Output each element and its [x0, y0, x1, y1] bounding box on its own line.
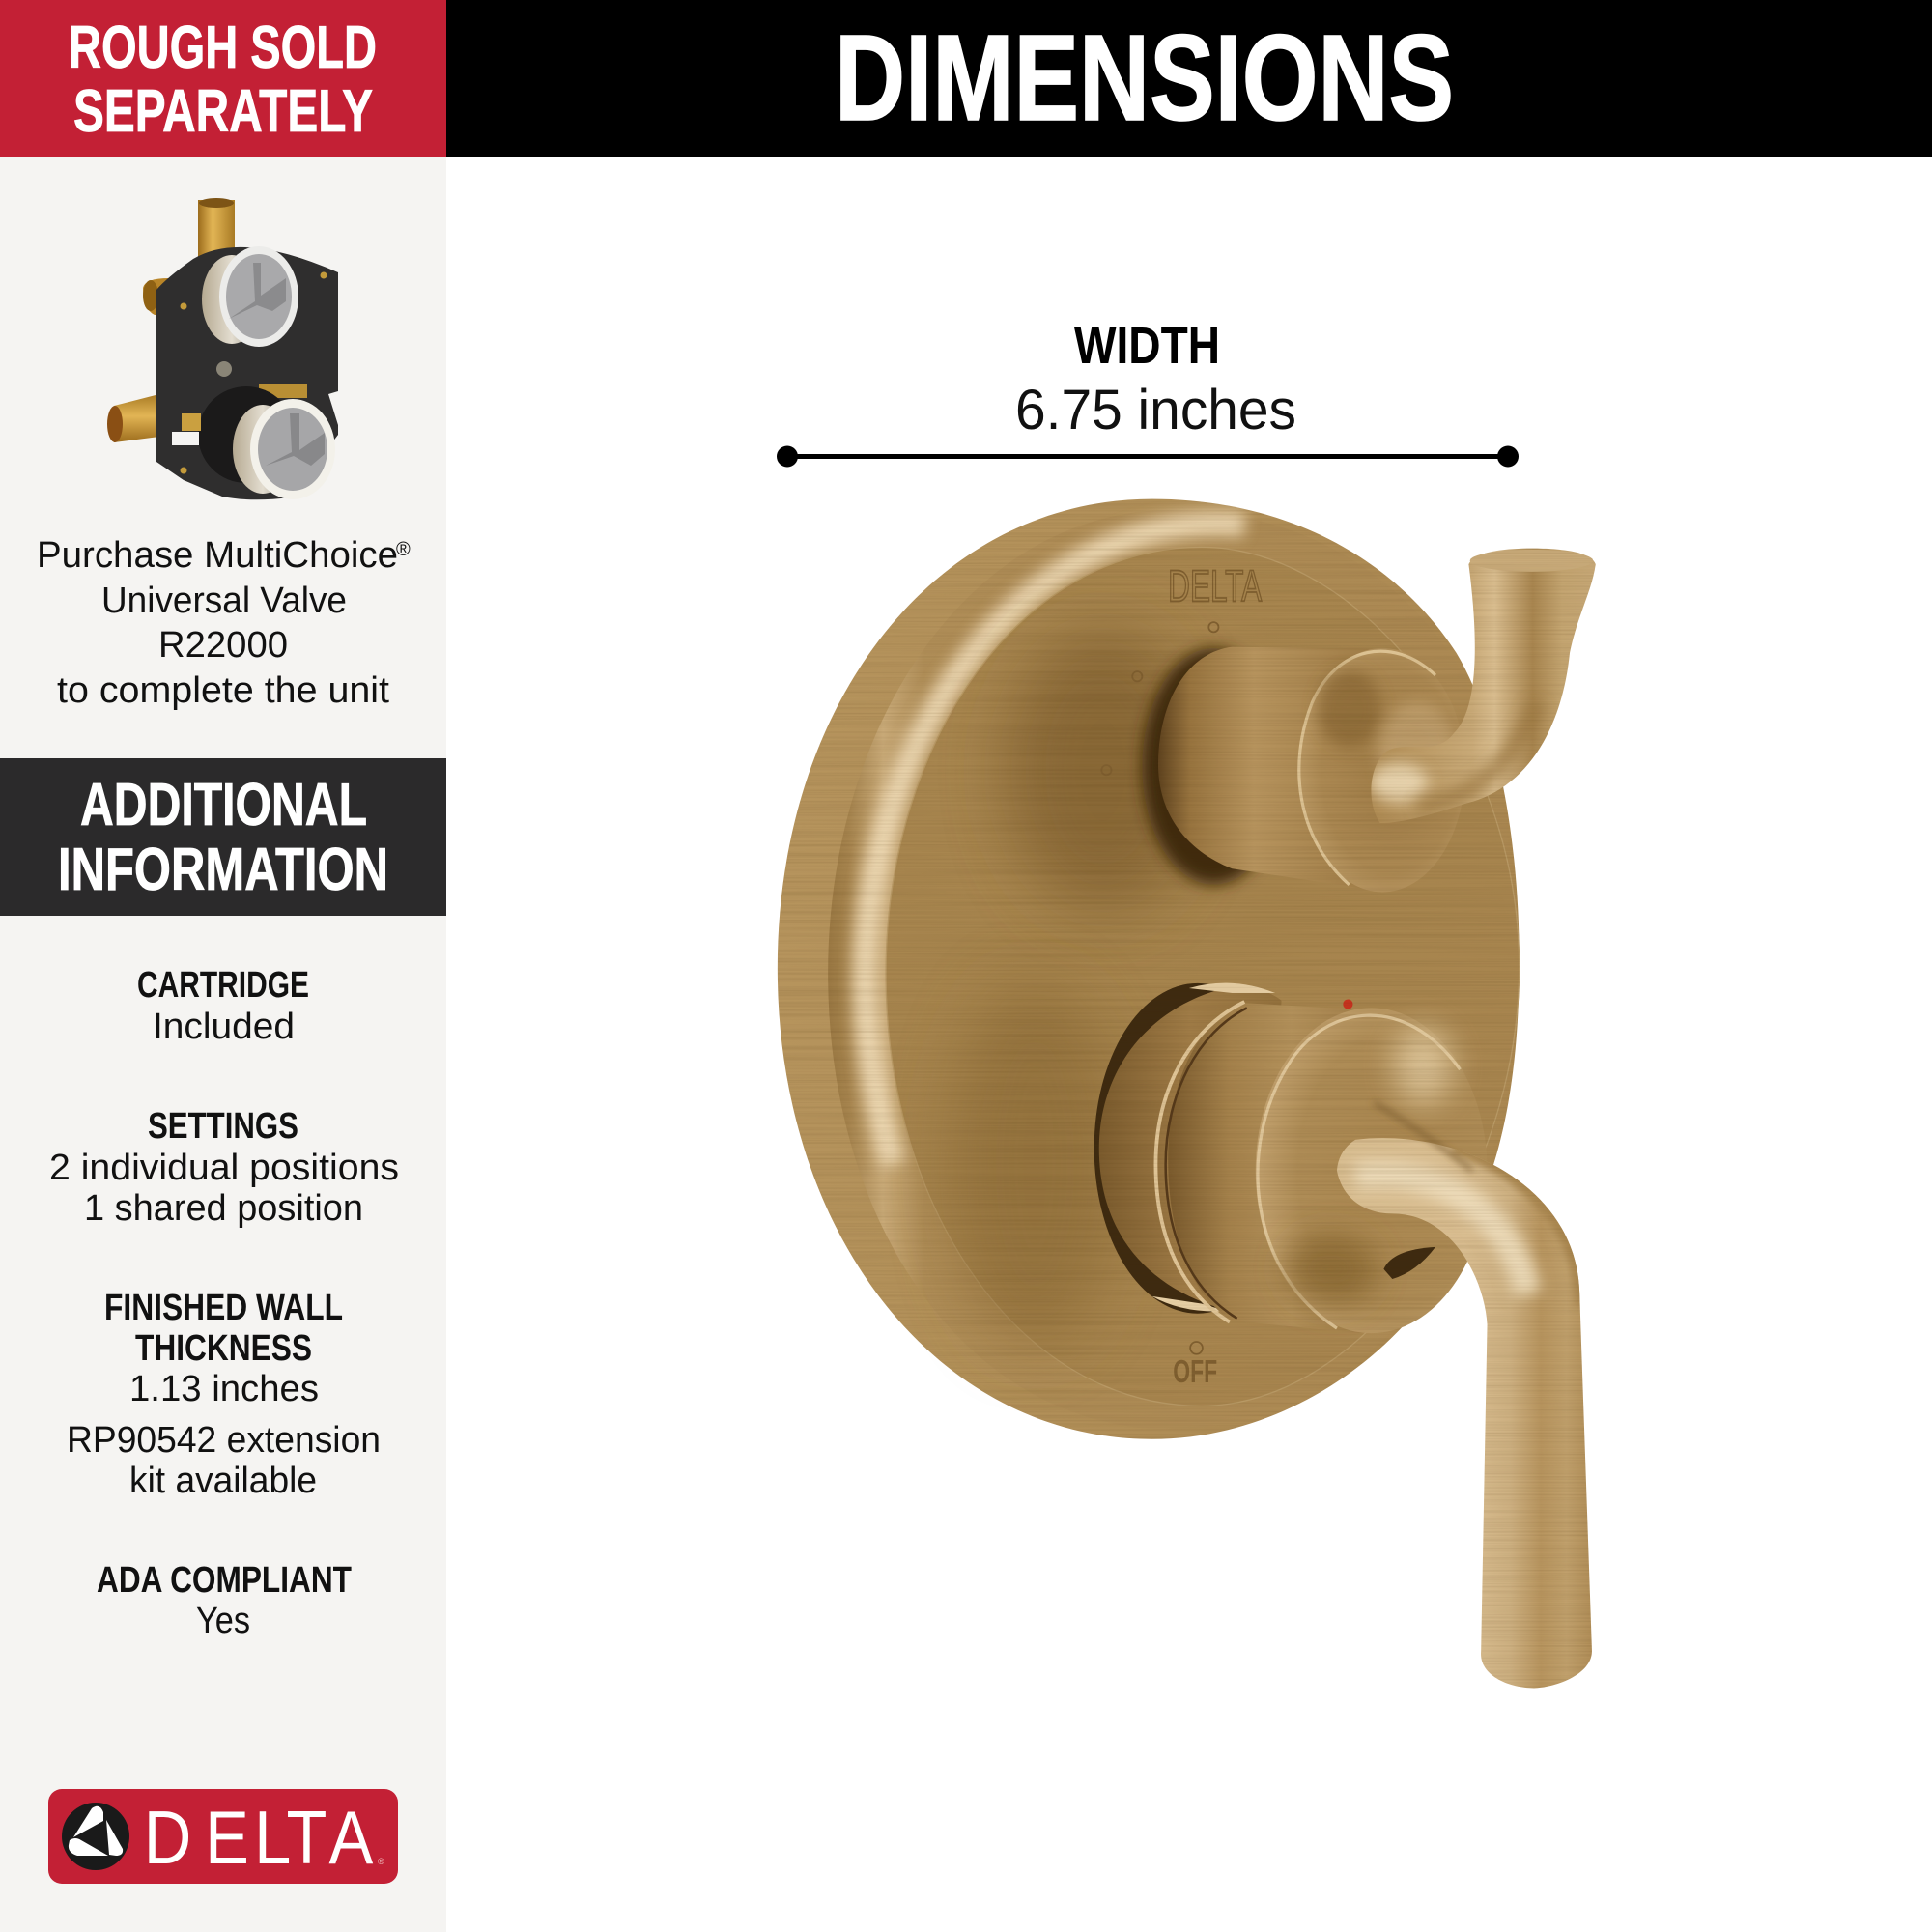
spec: settings: SETTINGS [148, 1106, 298, 1147]
spec: cartridge: CARTRIDGE [137, 965, 309, 1006]
lower knob back [1094, 983, 1301, 1314]
upper lever cap [1470, 550, 1593, 572]
off label: OFF [1173, 1354, 1217, 1390]
dimension label: width [1015, 317, 1296, 441]
front body rim [1155, 1002, 1244, 1322]
spec: settings: 1 shared position [84, 1188, 363, 1229]
ring bottom glint [1152, 1296, 1226, 1311]
spec: finished wall thickness: kit available [129, 1461, 317, 1501]
spec: finished wall thickness: RP90542 extension [67, 1420, 381, 1461]
dimension label: width: 6.75 inches [1015, 379, 1296, 441]
spec: finished wall thickness [67, 1288, 381, 1501]
heading: additional information: ADDITIONAL [80, 772, 367, 838]
lower ring body [1099, 987, 1282, 1306]
spec: ada compliant [97, 1560, 352, 1641]
lever shading [1355, 1146, 1584, 1306]
icon: rough-in valve [107, 198, 338, 499]
spec: ada compliant: Yes [196, 1601, 250, 1641]
text block: purchase valve note [37, 535, 411, 711]
lower lever handle [1337, 1138, 1592, 1688]
end face shading [1284, 1233, 1378, 1306]
red indicator [1343, 999, 1353, 1009]
end face glow [1394, 1026, 1453, 1105]
spec: finished wall thickness: FINISHED WALL [104, 1288, 343, 1328]
upper hub [1378, 702, 1457, 801]
spec: ada compliant: ADA COMPLIANT [97, 1560, 352, 1601]
upper knob body [1158, 647, 1386, 891]
dimension label: width: WIDTH [1074, 317, 1220, 375]
dimension line: width [777, 446, 1519, 468]
text block: purchase valve note: R22000 [158, 625, 288, 666]
end face rim [1258, 1015, 1460, 1328]
plate face [886, 547, 1520, 1406]
lower front body [1168, 1003, 1374, 1333]
red banner: rough sold separately: SEPARATELY [73, 78, 373, 145]
logo: delta: ® [378, 1857, 384, 1866]
position markers [1101, 622, 1218, 1354]
red banner: rough sold separately: ROUGH SOLD [69, 14, 377, 81]
upper knob end face [1300, 648, 1465, 892]
upper lever shading [1369, 702, 1538, 807]
rim shadow [1166, 1008, 1247, 1319]
heading: additional information [0, 758, 446, 916]
engraved logo: DELTA [1168, 560, 1262, 611]
heading: additional information: INFORMATION [58, 837, 388, 903]
spec: settings [49, 1106, 399, 1229]
ring glints [1189, 983, 1275, 993]
upper knob [1142, 648, 1285, 885]
spec: cartridge: Included [153, 1007, 295, 1047]
text block: purchase valve note: Purchase MultiChoice [37, 535, 398, 576]
spec: finished wall thickness: 1.13 inches [129, 1369, 319, 1409]
flange step [828, 510, 1516, 1430]
lower knob shadow [949, 980, 1122, 1350]
text block: purchase valve note: to complete the unit [57, 670, 389, 711]
red banner: rough sold separately [0, 0, 446, 157]
spec: finished wall thickness: THICKNESS [135, 1328, 312, 1369]
panel: left sidebar background [0, 0, 446, 1932]
spec: cartridge [137, 965, 309, 1047]
plate flange [778, 499, 1520, 1439]
title banner: DIMENSIONS [835, 10, 1454, 146]
upper knob recess [1318, 669, 1381, 748]
lever crease [1374, 1103, 1472, 1171]
logo: delta [48, 1789, 398, 1884]
ridge highlight [865, 524, 1244, 1164]
upper lever handle [1371, 549, 1596, 823]
lower knob end face [1256, 1008, 1488, 1333]
product: shower trim faucet [778, 499, 1596, 1688]
title banner [446, 0, 1932, 157]
logo: delta: DELTA [144, 1795, 373, 1880]
knob shadows [1005, 629, 1202, 912]
text block: purchase valve note: ® [396, 539, 411, 560]
spec: settings: 2 individual positions [49, 1148, 399, 1188]
slot [1383, 1247, 1435, 1279]
upper knob rim [1299, 651, 1435, 885]
text block: purchase valve note: Universal Valve [101, 581, 347, 621]
